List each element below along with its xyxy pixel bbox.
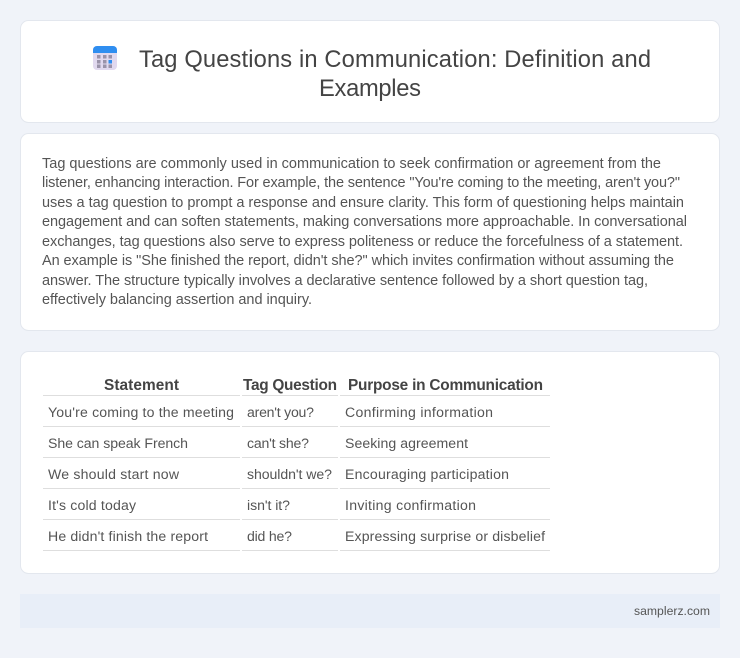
table header: Purpose in Communication (348, 377, 543, 394)
table row 3 (43, 466, 550, 489)
text block: description paragraph: answer. The structure typically involves a declarative sentence followed by a short question tag, (42, 273, 648, 289)
table row 3: shouldn't we? (247, 466, 332, 482)
table row 1: You're coming to the meeting (48, 404, 234, 420)
table header (43, 377, 550, 396)
table row 4: isn't it? (247, 497, 290, 513)
icon: calendar (93, 46, 117, 70)
text block: description paragraph: listener, enhancing interaction. For example, the sentence "You're coming to the meeting, aren't you?" (42, 175, 680, 191)
table row 2: She can speak French (48, 435, 188, 451)
table row 5: Expressing surprise or disbelief (345, 528, 545, 544)
title: Examples (319, 76, 421, 102)
text block: description paragraph: effectively balancing assertion and inquiry. (42, 292, 312, 308)
table row 3: Encouraging participation (345, 466, 509, 482)
title: Tag Questions in Communication: Definition and (139, 47, 651, 73)
table row 2: can't she? (247, 435, 309, 451)
table row 3: We should start now (48, 466, 180, 482)
text block: description paragraph: uses a tag question to prompt a response and ensure clarity. This form of questioning helps maintain (42, 195, 684, 211)
table header: Tag Question (243, 377, 337, 394)
title (139, 47, 651, 102)
table row 1: aren't you? (247, 404, 314, 420)
footer source text: samplerz.com (634, 604, 710, 618)
table row 5: did he? (247, 528, 292, 544)
table row 2 (43, 435, 550, 458)
table row 5: He didn't finish the report (48, 528, 208, 544)
table: tag question examples (43, 377, 550, 551)
table row 5 (43, 528, 550, 551)
panel: title card (20, 20, 720, 122)
table row 1 (43, 404, 550, 427)
panel: description (20, 134, 720, 330)
table row 4: Inviting confirmation (345, 497, 476, 513)
text block: description paragraph: Tag questions are commonly used in communication to seek confirmation or agreement from the (42, 156, 661, 172)
table row 1: Confirming information (345, 404, 493, 420)
text block: description paragraph: An example is "She finished the report, didn't she?" which invites confirmation without assuming the (42, 253, 674, 269)
footer bar (20, 594, 720, 628)
text block: description paragraph (42, 156, 687, 308)
text block: description paragraph: exchanges, tag questions also serve to express politeness or reduce the forcefulness of a statement. (42, 234, 683, 250)
text block: description paragraph: engagement and can soften statements, making conversations more approachable. In conversational (42, 214, 687, 230)
table row 4 (43, 497, 550, 520)
table row 4: It's cold today (48, 497, 137, 513)
table row 2: Seeking agreement (345, 435, 468, 451)
table header: Statement (104, 377, 179, 394)
panel: table card (20, 352, 720, 574)
